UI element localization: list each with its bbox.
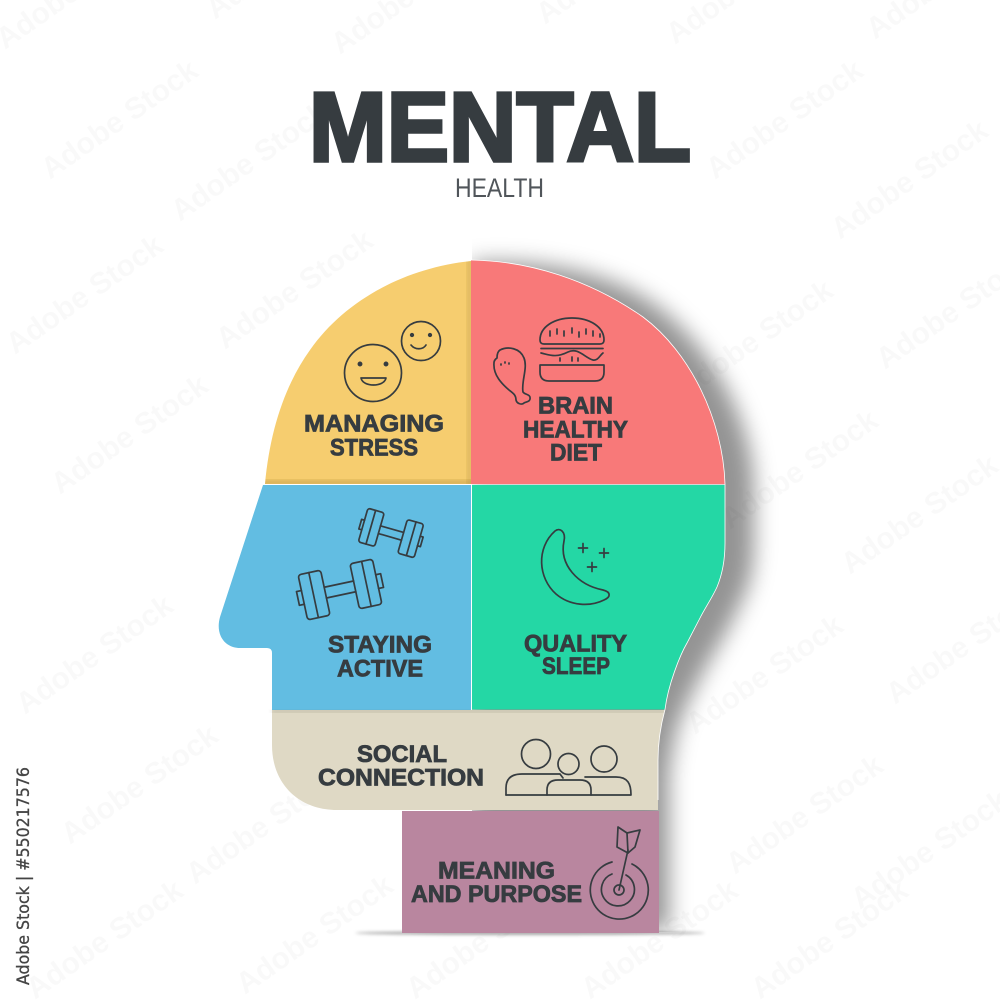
watermark pattern: Adobe Stock	[715, 403, 884, 536]
watermark pattern: Adobe Stock	[700, 53, 869, 186]
label: social connection: SOCIAL	[357, 741, 447, 768]
watermark pattern: Adobe Stock	[55, 718, 224, 851]
label: managing stress	[304, 410, 444, 462]
title: MENTAL	[309, 72, 691, 182]
watermark pattern: Adobe Stock	[720, 748, 889, 881]
panel: meaning and purpose	[402, 811, 659, 933]
watermark pattern: Adobe Stock	[670, 273, 839, 406]
panel: social connection	[272, 710, 665, 810]
subtitle: HEALTH	[455, 173, 544, 203]
icon: dumbbells	[293, 507, 427, 621]
label: brain healthy diet: BRAIN	[538, 392, 613, 420]
label: brain healthy diet: DIET	[550, 440, 602, 466]
watermark pattern: Adobe Stock	[35, 53, 204, 186]
panel: staying active	[219, 485, 471, 710]
icon: moon and stars	[542, 530, 609, 604]
watermark pattern: Adobe Stock	[10, 588, 179, 721]
panel: brain healthy diet	[471, 260, 725, 484]
watermark pattern: Adobe Stock	[230, 868, 399, 1000]
watermark pattern: Adobe Stock	[680, 608, 849, 741]
label: managing stress: MANAGING	[304, 410, 444, 438]
icon: three people	[506, 740, 631, 795]
label: brain healthy diet: HEALTHY	[523, 416, 628, 444]
panel: managing stress	[265, 261, 471, 484]
watermark pattern: Adobe Stock	[165, 95, 334, 228]
label: meaning and purpose: MEANING	[438, 858, 555, 884]
icon: burger and chicken leg	[494, 318, 604, 404]
label: social connection	[318, 741, 484, 792]
label: meaning and purpose: AND PURPOSE	[411, 881, 582, 908]
label: quality sleep: QUALITY	[524, 630, 627, 658]
watermark pattern: Adobe Stock	[835, 448, 1000, 581]
label: staying active	[328, 632, 432, 682]
icon: smiling faces	[344, 322, 440, 402]
ground shadow	[355, 931, 705, 935]
panel edge shadows	[260, 258, 725, 800]
watermark pattern: Adobe Stock	[825, 113, 994, 246]
label: quality sleep: SLEEP	[542, 653, 610, 680]
label: brain healthy diet	[523, 392, 628, 466]
label: staying active: ACTIVE	[337, 656, 423, 682]
label: social connection: CONNECTION	[318, 764, 484, 792]
panel: quality sleep	[472, 485, 725, 710]
watermark pattern: Adobe Stock	[180, 758, 349, 891]
label: managing stress: STRESS	[330, 434, 418, 462]
watermark pattern: Adobe Stock	[45, 368, 214, 501]
label: quality sleep	[524, 630, 627, 680]
stock credit: Adobe Stock | #550217576	[14, 767, 34, 985]
label: staying active: STAYING	[328, 632, 432, 658]
watermark pattern: Adobe Stock	[0, 228, 169, 361]
label: meaning and purpose	[411, 858, 582, 908]
icon: target with arrow	[590, 827, 648, 919]
head shadow	[471, 262, 754, 930]
watermark pattern: Adobe Stock	[210, 223, 379, 356]
